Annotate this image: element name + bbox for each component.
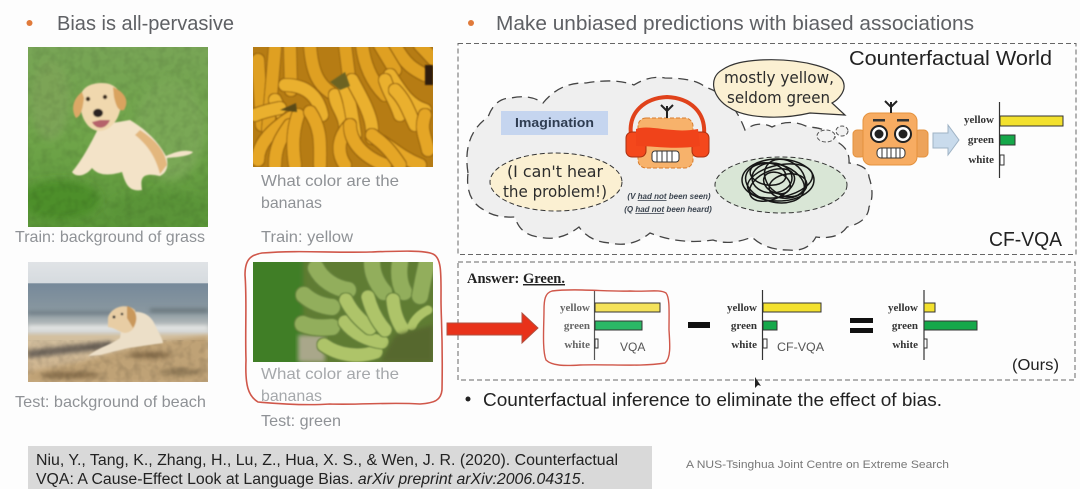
chart: CF-VQA prediction: white: [968, 154, 994, 166]
chart: CF-VQA: green: [731, 320, 757, 332]
chart: CF-VQA: yellow: [727, 302, 757, 314]
small thought bubbles: [817, 126, 848, 142]
bubble: I can't hear the problem: (I can't hear: [507, 162, 603, 181]
caption: train grass: Train: background of grass: [15, 229, 205, 246]
robot: seeing: [853, 101, 928, 165]
bullet: counterfactual inference: Counterfactual inference to eliminate the effect of bias.: [483, 390, 942, 410]
caption: train yellow: Train: yellow: [261, 229, 353, 246]
answer heading: Answer: Green.: [467, 271, 565, 287]
panel title: Counterfactual World: [849, 48, 1052, 70]
chart: VQA: [560, 290, 660, 360]
caption: test green: Test: green: [261, 413, 341, 430]
panel: answer: [458, 262, 1075, 380]
heading: bias is all-pervasive: Bias is all-pervasive: [57, 13, 234, 35]
photo: dog on beach: [28, 262, 208, 382]
chart: VQA: white: [564, 339, 590, 351]
chart: VQA: green: [564, 320, 590, 332]
chart: CF-VQA prediction: green: [968, 134, 994, 146]
equals sign: [850, 318, 873, 333]
cloud: imagination: [467, 77, 872, 250]
speech bubble: mostly yellow: mostly yellow,: [724, 68, 834, 87]
chart: ours: white: [892, 339, 918, 351]
caption: banana question test: bananas: [261, 388, 322, 405]
note: had not been seen: (V had not been seen): [627, 192, 711, 201]
note: had not been seen: (Q had not been heard): [624, 205, 712, 214]
caption: banana question train: What color are the: [261, 173, 399, 190]
panel: counterfactual world: [458, 44, 1076, 254]
arrow: blue block: [933, 125, 959, 155]
photo: yellow bananas: [253, 45, 436, 167]
caption: banana question train: bananas: [261, 195, 322, 212]
label: CF-VQA: CF-VQA: [989, 229, 1063, 251]
caption: banana question test: What color are the: [261, 366, 399, 383]
speech bubble: mostly yellow: [714, 60, 845, 117]
chart: ours: [888, 290, 977, 360]
label: imagination: [501, 111, 608, 135]
chart: CF-VQA prediction: [964, 102, 1063, 178]
chart: CF-VQA prediction: yellow: [964, 114, 994, 126]
red arrow: [447, 313, 538, 343]
speech bubble: mostly yellow: seldom green: [727, 88, 830, 107]
label: imagination: Imagination: [515, 115, 594, 130]
citation box: [28, 446, 652, 489]
caption: test beach: Test: background of beach: [15, 394, 206, 411]
bubble: I can't hear the problem: [490, 153, 622, 211]
note: had not been seen: [624, 192, 712, 214]
chart: CF-VQA: white: [731, 339, 757, 351]
citation box: VQA: A Cause-Effect Look at Language Bias. arXiv preprint arXiv:2006.04315 .: [36, 471, 585, 488]
bubble: I can't hear the problem: the problem!): [503, 182, 607, 201]
chart: ours: green: [892, 320, 918, 332]
hand-drawn red outline around VQA: [544, 290, 670, 365]
bubble: scribble: [715, 151, 847, 213]
heading: make unbiased predictions: Make unbiased predictions with biased associations: [496, 13, 974, 35]
photo: puppy on grass: [20, 47, 210, 228]
chart: CF-VQA: CF-VQA: [777, 340, 824, 354]
cursor: [755, 377, 761, 388]
caption: banana question train: [261, 173, 399, 212]
chart: ours: yellow: [888, 302, 918, 314]
hand-drawn red outline around test banana: [245, 251, 442, 405]
citation box: Niu, Y., Tang, K., Zhang, H., Lu, Z., Hua, X. S., & Wen, J. R. (2020). Counterfactual: [36, 452, 618, 469]
label: ours: (Ours): [1012, 357, 1059, 374]
chart: CF-VQA: [727, 290, 824, 360]
footer: joint centre: A NUS-Tsinghua Joint Centre on Extreme Search: [686, 459, 949, 471]
robot: blindfolded with headphones: [626, 97, 709, 168]
minus sign: [688, 322, 710, 328]
chart: VQA: yellow: [560, 302, 590, 314]
caption: banana question test: [261, 366, 399, 405]
photo: green bananas: [253, 262, 433, 362]
chart: VQA: VQA: [620, 340, 645, 354]
